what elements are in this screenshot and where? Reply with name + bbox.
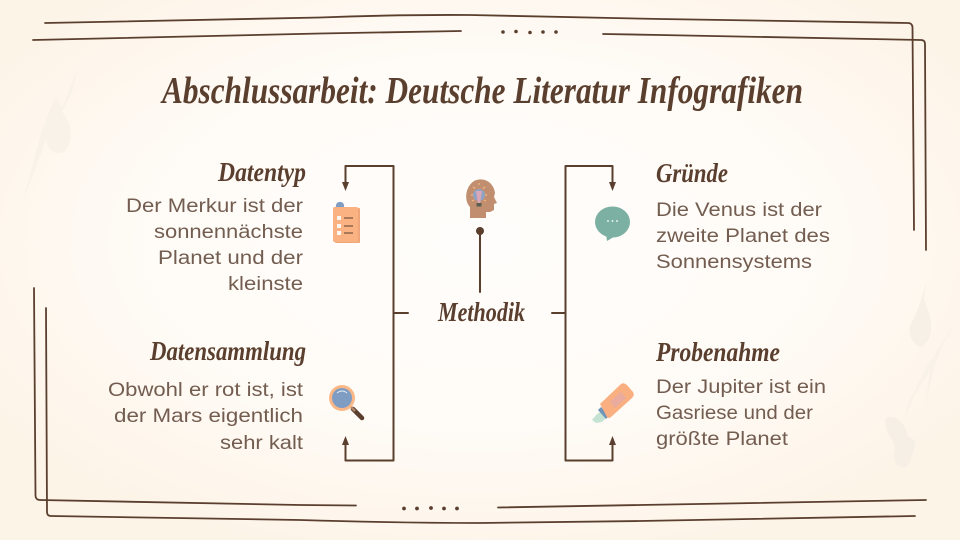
block: Datensammlung: sehr kalt: [220, 433, 304, 454]
block: Gründe: zweite Planet des: [656, 226, 830, 247]
block: Datensammlung: Datensammlung: [149, 336, 306, 366]
block: Probenahme: größte Planet: [656, 429, 789, 450]
icon: speech bubble: [595, 206, 630, 241]
decorative frame: top: [33, 15, 926, 250]
title: Abschlussarbeit: Deutsche Literatur Infografiken: [160, 70, 803, 112]
connector: center stem: [476, 227, 484, 292]
block: Datentyp: Der Merkur ist der: [126, 196, 304, 217]
block: Datentyp: kleinste: [228, 274, 303, 295]
block: Datentyp: Datentyp: [217, 157, 306, 187]
connector: right bracket with arrows: [552, 166, 616, 460]
icon: highlighter: [592, 383, 634, 423]
block: Datentyp: Planet und der: [158, 248, 304, 269]
block: Probenahme: [655, 337, 826, 450]
center label: Methodik: Methodik: [437, 297, 525, 327]
decorative frame: bottom: [34, 288, 926, 523]
block: Gründe: Die Venus ist der: [656, 200, 823, 221]
icon: clipboard: [333, 202, 360, 243]
icon: head with light bulb: [466, 179, 497, 218]
block: Datentyp: sonnennächste: [154, 222, 303, 243]
block: Datentyp: [126, 157, 306, 295]
block: Datensammlung: Obwohl er rot ist, ist: [108, 380, 304, 401]
block: Datensammlung: der Mars eigentlich: [114, 406, 303, 427]
block: Gründe: [656, 158, 830, 273]
block: Gründe: Gründe: [656, 158, 728, 188]
block: Probenahme: Gasriese und der: [656, 403, 814, 424]
icon: magnifying glass: [329, 385, 362, 418]
block: Probenahme: Der Jupiter ist ein: [656, 377, 826, 398]
block: Datensammlung: [108, 336, 306, 454]
connector: left bracket with arrows: [342, 166, 408, 460]
block: Gründe: Sonnensystems: [656, 252, 812, 273]
block: Probenahme: Probenahme: [655, 337, 780, 367]
